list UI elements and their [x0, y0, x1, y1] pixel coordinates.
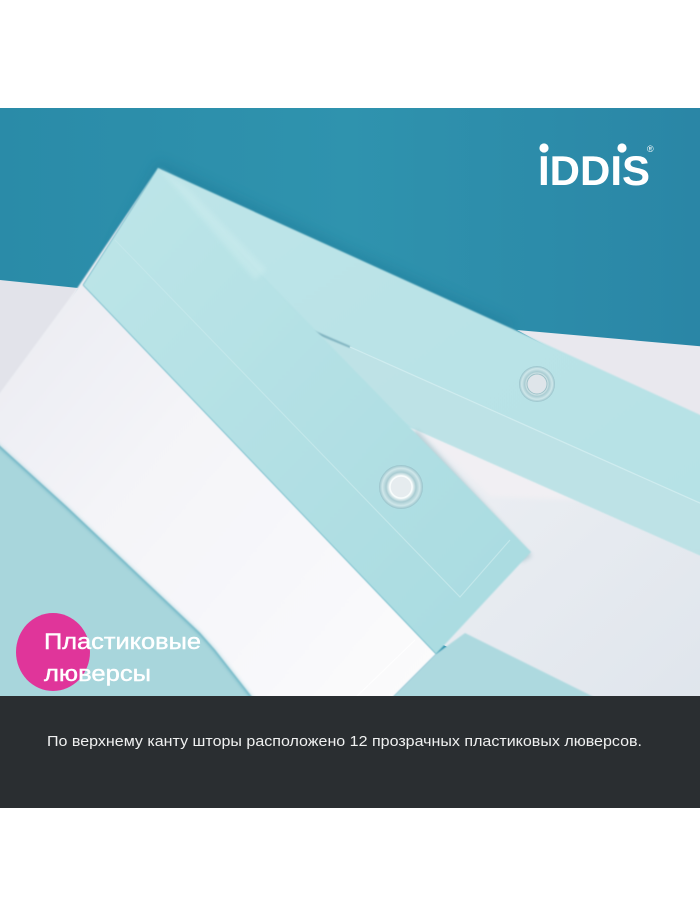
second hem strip	[158, 168, 700, 564]
grommet, lower	[379, 465, 423, 509]
darker band below the strip seam	[422, 432, 574, 500]
hem fold highlight	[161, 168, 260, 276]
main white stripe	[0, 168, 436, 710]
infographic canvas	[0, 108, 700, 808]
white curtain stripe background, right	[517, 330, 700, 416]
aqua stripe, bottom centre	[394, 632, 593, 696]
dark caption band	[0, 696, 700, 808]
shadow of the fold on teal	[180, 177, 401, 276]
teal curtain stripe	[0, 108, 700, 696]
slit at start of strip seam	[313, 330, 350, 348]
strip seam stitching	[350, 347, 700, 512]
logo: IDDIS: ®	[647, 144, 654, 154]
aqua stripe, bottom left	[0, 443, 254, 696]
heading: plastic grommets: люверсы	[44, 661, 151, 686]
main aqua hem	[83, 168, 531, 654]
grommet, upper	[519, 366, 555, 402]
heading: plastic grommets: Пластиковые	[44, 629, 201, 654]
pale wedge under hem	[536, 487, 560, 496]
logo: IDDIS: IDDIS	[538, 147, 650, 194]
white seam at bottom	[353, 640, 415, 700]
heading: plastic grommets	[44, 629, 201, 686]
shadow under first hem	[405, 430, 532, 562]
caption text: По верхнему канту шторы расположено 12 прозрачных пластиковых люверсов.	[47, 733, 642, 750]
hem stitching	[148, 274, 510, 598]
white curtain stripe background, left	[0, 280, 78, 394]
lower right fabric	[409, 427, 700, 696]
pink blob	[16, 613, 90, 691]
photo: folded curtain	[0, 108, 700, 710]
